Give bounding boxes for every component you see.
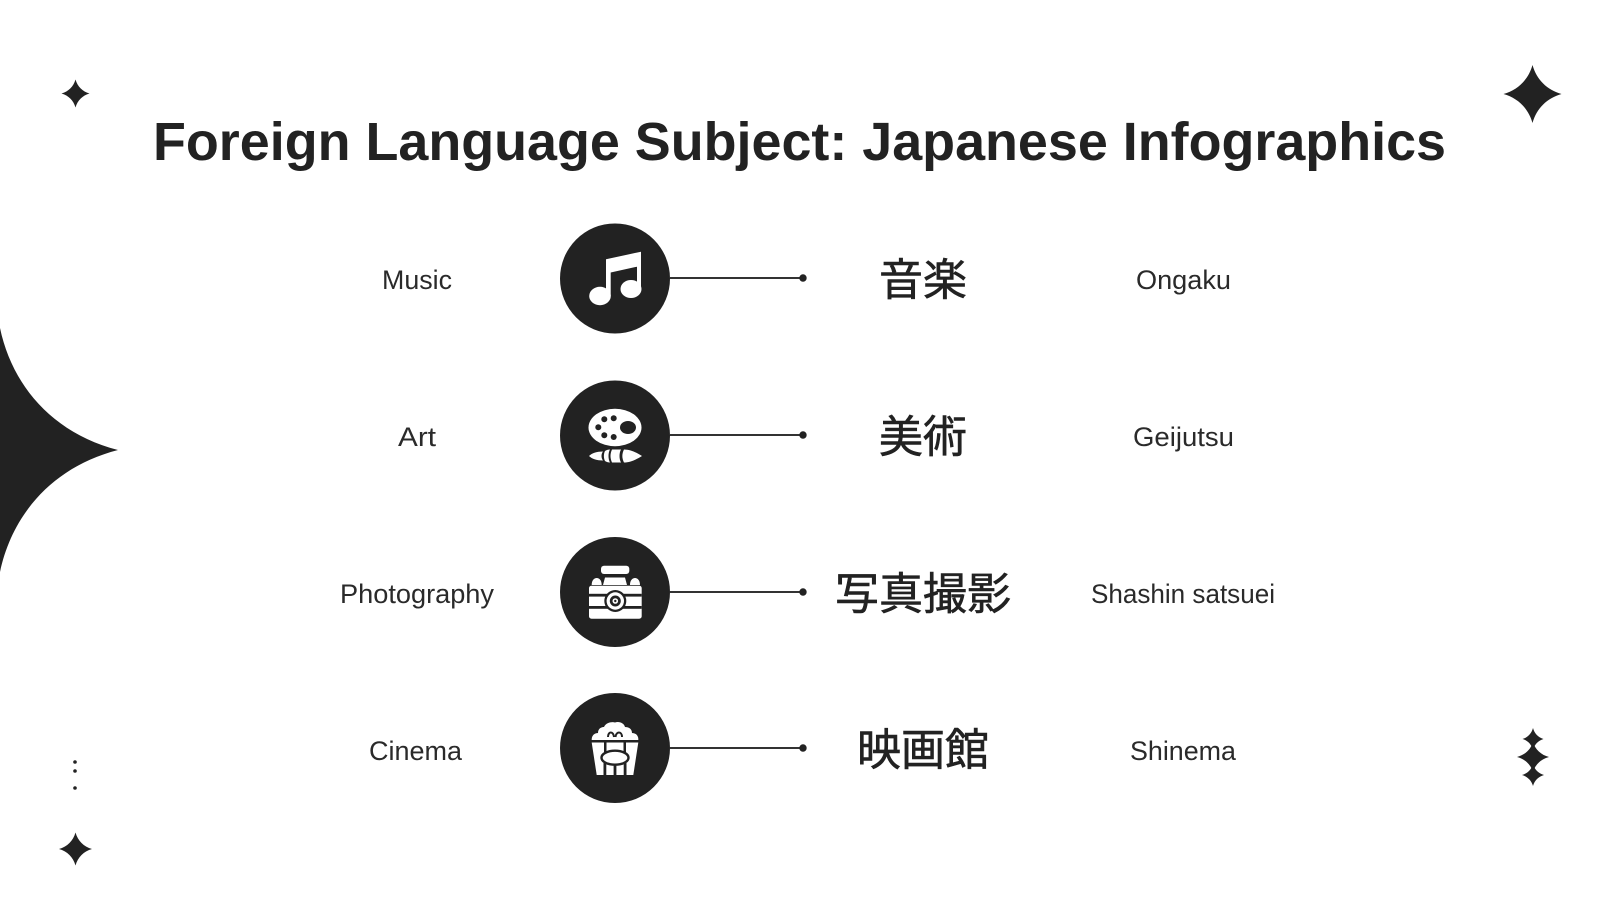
connector line with dot xyxy=(670,588,807,596)
label: Cinema: Cinema xyxy=(369,736,463,766)
decorative dots, bottom left xyxy=(73,760,77,790)
title: Foreign Language Subject: Japanese Infographics xyxy=(153,113,1446,172)
label: Music: Music xyxy=(382,265,452,295)
row: art xyxy=(398,380,1234,490)
decorative triple star, right xyxy=(1517,728,1549,786)
reading: Shashin satsuei: Shashin satsuei xyxy=(1091,579,1275,609)
kanji: music: 音楽 xyxy=(879,256,967,305)
icon: popcorn in circle xyxy=(560,693,670,803)
connector line with dot xyxy=(670,274,807,282)
decorative large half star, left edge xyxy=(0,328,118,572)
row: music xyxy=(382,224,1231,334)
label: Photography: Photography xyxy=(340,579,494,609)
icon: palette and brush in circle xyxy=(560,380,670,490)
reading: Geijutsu: Geijutsu xyxy=(1133,422,1234,452)
label: Art: Art xyxy=(398,422,437,452)
decorative star, top right xyxy=(1504,65,1562,123)
kanji: photography: 写真撮影 xyxy=(835,570,1011,619)
reading: Ongaku: Ongaku xyxy=(1136,265,1231,295)
kanji: cinema: 映画館 xyxy=(857,726,989,775)
connector line with dot xyxy=(670,744,807,752)
row: cinema xyxy=(369,693,1237,803)
kanji: art: 美術 xyxy=(879,413,967,462)
connector line with dot xyxy=(670,431,807,439)
decorative star, top left xyxy=(62,80,90,108)
decorative star, bottom left xyxy=(59,832,92,866)
reading: Shinema: Shinema xyxy=(1130,736,1237,766)
icon: music note in circle xyxy=(560,224,670,334)
icon: camera in circle xyxy=(560,537,670,647)
row: photography xyxy=(340,537,1275,647)
